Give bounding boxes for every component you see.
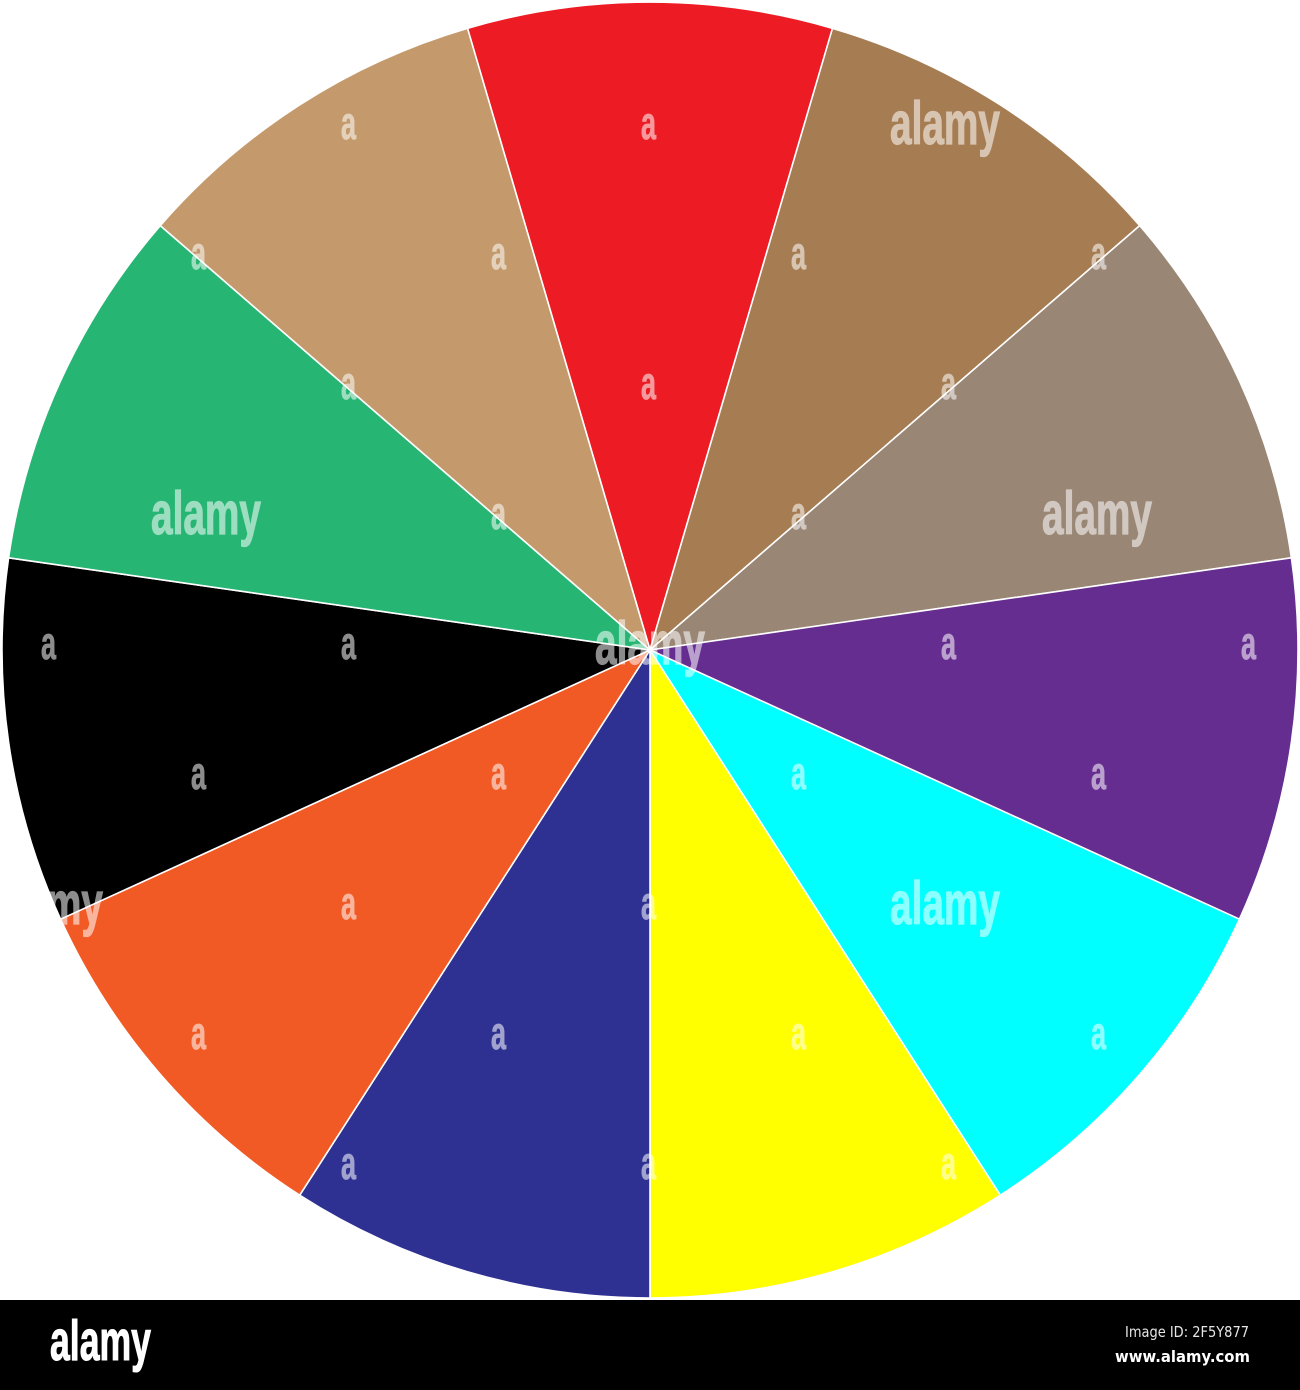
slice: cyan bbox=[650, 650, 1239, 1195]
watermark: repeated small letters: a bbox=[341, 97, 356, 149]
watermark: repeated small letters: a bbox=[941, 1137, 956, 1189]
watermark: repeated small letters: a bbox=[491, 227, 506, 279]
slice: black bbox=[2, 558, 650, 919]
watermark: repeated small letters: a bbox=[941, 617, 956, 669]
watermark: repeated small letters: a bbox=[341, 1137, 356, 1189]
footer image id: Image ID: 2F5Y877 bbox=[1125, 1323, 1249, 1341]
watermark: repeated small letters: a bbox=[191, 227, 206, 279]
watermark: repeated small letters: a bbox=[1091, 1007, 1106, 1059]
watermark: repeated small letters: a bbox=[191, 1007, 206, 1059]
slice: orange bbox=[61, 650, 650, 1195]
watermark: large alamy words: alamy bbox=[890, 90, 1000, 157]
watermark: repeated small letters: a bbox=[341, 617, 356, 669]
watermark: repeated small letters: a bbox=[191, 747, 206, 799]
watermark: repeated small letters: a bbox=[791, 747, 806, 799]
slice: taupe bbox=[650, 226, 1291, 650]
watermark: large alamy words: alamy bbox=[1042, 480, 1152, 547]
slice: brown bbox=[650, 28, 1140, 650]
watermark: repeated small letters: a bbox=[791, 227, 806, 279]
slice: tan bbox=[160, 28, 650, 650]
watermark: large alamy words: alamy bbox=[151, 480, 261, 547]
watermark: repeated small letters: a bbox=[791, 487, 806, 539]
watermark: repeated small letters: a bbox=[341, 877, 356, 929]
footer logo: alamy: alamy bbox=[50, 1309, 151, 1373]
watermark: repeated small letters: a bbox=[1091, 747, 1106, 799]
slice: yellow bbox=[650, 650, 1000, 1298]
watermark: repeated small letters: a bbox=[341, 357, 356, 409]
watermark: repeated small letters: a bbox=[941, 357, 956, 409]
footer bar bbox=[0, 1300, 1300, 1390]
slice: purple bbox=[650, 558, 1298, 919]
footer website: www.alamy.com bbox=[1115, 1347, 1250, 1366]
watermark: large alamy words: alamy bbox=[890, 870, 1000, 937]
watermark: repeated small letters: a bbox=[641, 877, 656, 929]
watermark: repeated small letters: a bbox=[791, 1007, 806, 1059]
watermark: repeated small letters: a bbox=[1241, 617, 1256, 669]
watermark: repeated small letters: a bbox=[641, 1137, 656, 1189]
slice: navy bbox=[300, 650, 650, 1298]
watermark: repeated small letters: a bbox=[491, 747, 506, 799]
watermark: large alamy words bbox=[0, 90, 1152, 937]
watermark: repeated small letters: a bbox=[491, 1007, 506, 1059]
watermark: repeated small letters: a bbox=[641, 97, 656, 149]
watermark: repeated small letters: a bbox=[41, 617, 56, 669]
watermark: repeated small letters bbox=[41, 97, 1256, 1189]
watermark: large alamy words: alamy bbox=[595, 610, 705, 677]
slice: red bbox=[468, 2, 832, 650]
watermark: repeated small letters: a bbox=[491, 487, 506, 539]
watermark: repeated small letters: a bbox=[641, 357, 656, 409]
slice: green bbox=[9, 226, 650, 650]
watermark: repeated small letters: a bbox=[1091, 227, 1106, 279]
